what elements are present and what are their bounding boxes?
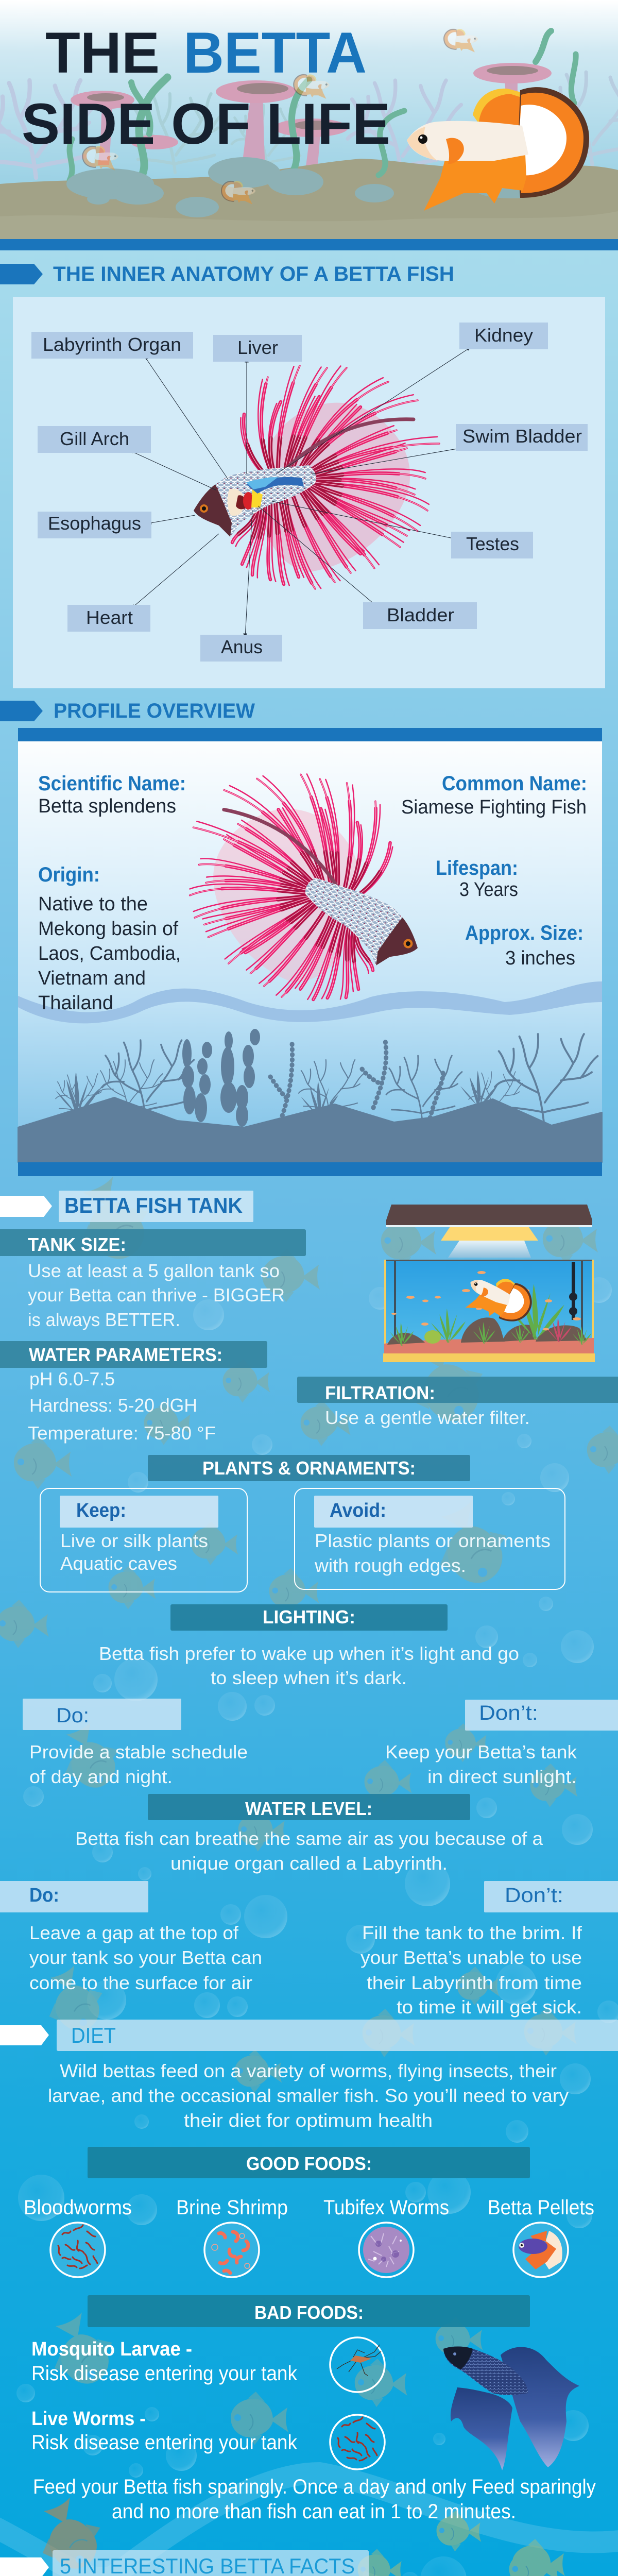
plants and ornaments	[40, 1455, 565, 1592]
filtration: FILTRATION:	[325, 1382, 435, 1403]
heading: betta fish tank: BETTA FISH TANK	[64, 1193, 243, 1217]
crowntail fish with organs	[194, 359, 445, 593]
heading: diet: DIET	[71, 2023, 116, 2047]
light wave bands	[0, 2473, 618, 2576]
large orange betta	[407, 87, 589, 211]
water parameters	[0, 1341, 267, 1444]
betta in tank	[460, 1265, 538, 1333]
tiny fish	[391, 1271, 581, 1330]
lighting don't: Keep your Betta’s tank	[385, 1741, 577, 1762]
fact: origin: Thailand	[38, 992, 113, 1014]
water surface wave	[18, 981, 602, 1023]
panel: profile overview	[18, 728, 602, 1176]
fact: common name: Siamese Fighting Fish	[401, 796, 587, 818]
hero banner	[0, 0, 618, 239]
fact: origin: Mekong basin of	[38, 918, 178, 940]
food: live worms: Live Worms -	[31, 2408, 146, 2430]
label: anus	[200, 635, 282, 662]
keep card: Aquatic caves	[60, 1553, 177, 1574]
food: betta pellets	[488, 2196, 594, 2277]
title	[22, 21, 390, 156]
fact: scientific name: Scientific Name:	[38, 772, 186, 795]
food: bloodworms	[24, 2196, 132, 2277]
lighting do: of day and night.	[29, 1766, 173, 1787]
label: kidney: Kidney	[474, 325, 533, 346]
tank size: is always BETTER.	[28, 1309, 180, 1330]
bad foods	[31, 2295, 530, 2469]
water parameters: Temperature: 75-80 °F	[28, 1422, 216, 1444]
feeding advice: and no more than fish can eat in 1 to 2 minutes.	[112, 2500, 516, 2523]
fact: size	[465, 922, 583, 969]
fact: origin: Laos, Cambodia,	[38, 943, 181, 964]
food: brine shrimp	[176, 2196, 288, 2277]
keep card: Live or silk plants	[60, 1530, 208, 1551]
rocks	[66, 157, 548, 217]
water level do: come to the surface for air	[29, 1972, 252, 1993]
fact: lifespan	[436, 857, 518, 901]
water level	[0, 1794, 618, 2018]
lighting: LIGHTING:	[263, 1606, 355, 1628]
label: gill arch: Gill Arch	[60, 428, 129, 449]
food: mosquito larvae: Mosquito Larvae -	[31, 2338, 192, 2360]
diet intro	[48, 2060, 569, 2131]
crowntail fish	[154, 744, 452, 1028]
blue top and bottom bars	[18, 728, 602, 741]
food: brine shrimp: Brine Shrimp	[176, 2196, 288, 2219]
diet intro: Wild bettas feed on a variety of worms, flying insects, their	[60, 2060, 557, 2081]
water level: unique organ called a Labyrinth.	[170, 1853, 448, 1874]
tank size: TANK SIZE:	[28, 1234, 126, 1255]
blue betta	[443, 2346, 579, 2470]
water level do	[0, 1881, 262, 1993]
rocks	[387, 1317, 587, 1345]
lighting do	[23, 1699, 248, 1787]
label: liver	[213, 335, 302, 362]
water parameters: pH 6.0-7.5	[29, 1368, 115, 1389]
food: mosquito larvae	[31, 2337, 385, 2392]
lighting don't	[385, 1700, 618, 1787]
food: live worms: Risk disease entering your tank	[31, 2431, 298, 2454]
feeding advice	[33, 2476, 596, 2523]
label: testes	[451, 532, 533, 558]
mushroom corals	[71, 63, 552, 180]
diet intro: their diet for optimum health	[184, 2110, 433, 2131]
lighting: to sleep when it’s dark.	[211, 1667, 407, 1688]
label: labyrinth organ: Labyrinth Organ	[43, 334, 181, 355]
background bubbles	[12, 1277, 618, 2576]
diet intro: larvae, and the occasional smaller fish. So you’ll need to vary	[48, 2085, 569, 2106]
water level don't: their Labyrinth from time	[367, 1972, 582, 1993]
food: live worms	[31, 2408, 385, 2469]
water level don't: to time it will get sick.	[397, 1996, 582, 2018]
label: liver: Liver	[237, 337, 278, 358]
label: esophagus	[38, 512, 151, 538]
good foods: GOOD FOODS:	[246, 2153, 372, 2174]
label: esophagus: Esophagus	[48, 513, 141, 534]
fact: size: 3 inches	[505, 947, 575, 969]
heading: profile overview: PROFILE OVERVIEW	[54, 700, 255, 722]
filtration: Use a gentle water filter.	[325, 1407, 530, 1428]
avoid card: Avoid:	[330, 1500, 386, 1521]
label: swim bladder: Swim Bladder	[462, 426, 582, 447]
food: tubifex worms: Tubifex Worms	[323, 2196, 449, 2219]
lighting	[23, 1604, 618, 1787]
filtration	[297, 1377, 618, 1428]
fact: origin: Origin:	[38, 863, 100, 886]
fact: lifespan: Lifespan:	[436, 857, 518, 879]
keep card: Keep:	[76, 1500, 126, 1521]
illustration: aquarium	[383, 1205, 595, 1362]
label: heart: Heart	[86, 607, 133, 628]
plants	[390, 1284, 592, 1346]
small faded fish	[82, 29, 478, 204]
lighting don't: Don’t:	[479, 1702, 538, 1724]
fact: scientific name: Betta splendens	[38, 795, 176, 817]
good foods	[24, 2147, 594, 2277]
water level do: Leave a gap at the top of	[29, 1922, 239, 1943]
avoid card: with rough edges.	[314, 1555, 466, 1576]
fact: origin: Native to the	[38, 893, 148, 915]
title: SIDE OF LIFE	[22, 92, 390, 156]
label: bladder: Bladder	[387, 604, 454, 625]
label: swim bladder	[456, 424, 588, 451]
label: gill arch	[38, 426, 151, 453]
water level don't: Don’t:	[505, 1884, 563, 1907]
water parameters: WATER PARAMETERS:	[29, 1344, 222, 1365]
label: kidney	[459, 323, 548, 349]
pale background corals	[0, 72, 618, 178]
lighting don't: in direct sunlight.	[427, 1766, 577, 1787]
pointer arrows	[130, 347, 471, 637]
fact: common name	[401, 772, 587, 818]
food: mosquito larvae: Risk disease entering your tank	[31, 2362, 298, 2385]
water level don't: your Betta’s unable to use	[360, 1947, 582, 1968]
label: bladder	[363, 602, 477, 629]
background fish swarm	[0, 1170, 618, 2576]
gravel	[384, 1338, 594, 1354]
avoid card: Plastic plants or ornaments	[315, 1530, 551, 1551]
plants and ornaments: PLANTS & ORNAMENTS:	[202, 1458, 416, 1479]
tank size: Use at least a 5 gallon tank so	[28, 1260, 280, 1281]
tank size	[0, 1229, 306, 1330]
lighting do: Do:	[56, 1704, 89, 1727]
lamp	[441, 1224, 538, 1241]
seabed silhouette	[18, 1029, 602, 1162]
label: anus: Anus	[221, 636, 263, 657]
fact: origin	[38, 863, 181, 1014]
heading: betta fish tank	[0, 1191, 253, 1222]
panel: anatomy diagram	[13, 297, 605, 688]
title: THE	[45, 21, 160, 85]
water level do: Do:	[29, 1885, 59, 1906]
title: BETTA	[183, 21, 367, 85]
avoid card	[295, 1488, 565, 1589]
water level don't	[360, 1881, 618, 2018]
filter	[569, 1262, 577, 1320]
water level don't: Fill the tank to the brim. If	[362, 1922, 582, 1943]
fact: size: Approx. Size:	[465, 922, 583, 944]
fact: common name: Common Name:	[442, 772, 587, 795]
tank size: your Betta can thrive - BIGGER	[28, 1284, 285, 1306]
label: testes: Testes	[466, 533, 519, 554]
keep card	[40, 1488, 247, 1592]
fact: scientific name	[38, 772, 186, 817]
bad foods: BAD FOODS:	[254, 2302, 364, 2323]
fact: lifespan: 3 Years	[459, 879, 518, 901]
lighting: Betta fish prefer to wake up when it’s light and go	[99, 1643, 519, 1664]
heading: diet	[0, 2020, 618, 2051]
water level do: your tank so your Betta can	[29, 1947, 262, 1968]
lighting do: Provide a stable schedule	[29, 1741, 248, 1762]
tank	[384, 1260, 594, 1362]
food: tubifex worms	[323, 2196, 449, 2277]
water parameters: Hardness: 5-20 dGH	[29, 1395, 197, 1416]
seaweed	[70, 31, 576, 180]
label: labyrinth organ	[31, 332, 193, 359]
water level: WATER LEVEL:	[245, 1798, 372, 1819]
heading: inner anatomy: THE INNER ANATOMY OF A BETTA FISH	[53, 263, 454, 285]
food: betta pellets: Betta Pellets	[488, 2196, 594, 2219]
fact: origin: Vietnam and	[38, 968, 146, 989]
label: heart	[67, 605, 150, 632]
sand floor	[0, 159, 618, 239]
food: bloodworms: Bloodworms	[24, 2196, 132, 2219]
water level: Betta fish can breathe the same air as you because of a	[75, 1828, 543, 1849]
